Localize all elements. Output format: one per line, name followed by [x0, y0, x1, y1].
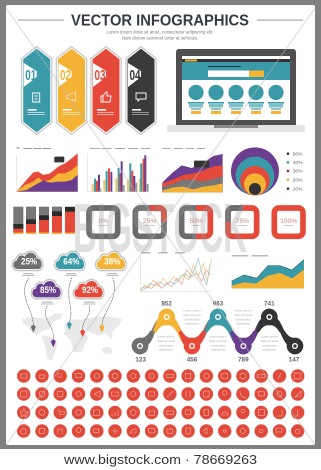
circle chart legend: 40%	[293, 160, 303, 166]
two series area chart	[232, 255, 304, 288]
banner 02: 02	[60, 67, 71, 84]
world map	[22, 313, 122, 360]
cloud 64%: 64%	[63, 256, 80, 267]
dashed leader lines	[25, 278, 115, 340]
cloud 85%: 85%	[40, 284, 56, 295]
progress square 50%: 50%	[189, 218, 203, 225]
timeline numbers: 789	[238, 357, 249, 364]
timeline captions: adipiscing	[159, 348, 173, 352]
subtitle: Lorem ipsum dolor sit amet, consectetur adipiscing elit.	[107, 30, 213, 34]
timeline captions: consectetur	[210, 343, 226, 347]
timeline captions: consectetur	[184, 317, 200, 321]
timeline numbers: 123	[135, 357, 146, 364]
subtitle	[107, 30, 213, 40]
timeline captions: Lorem ipsum	[183, 309, 201, 313]
circle chart legend: 50%	[293, 151, 303, 157]
cloud 92%: 92%	[82, 284, 98, 295]
progress square 25%	[135, 208, 164, 236]
subtitle: Nam dictum euismod tortor at vehicula.	[122, 36, 198, 40]
timeline captions	[157, 309, 278, 352]
circle chart legend: 20%	[293, 177, 303, 183]
stacked area chart	[162, 148, 223, 192]
timeline captions: Lorem ipsum	[261, 335, 278, 339]
timeline numbers: 741	[264, 301, 275, 308]
progress square 75%: 75%	[236, 218, 249, 225]
timeline captions: Lorem ipsum	[157, 335, 175, 339]
cloud 25%: 25%	[21, 256, 37, 267]
banner 04: 04	[130, 67, 141, 84]
timeline numbers: 456	[187, 357, 198, 364]
circle chart legend	[287, 151, 303, 192]
timeline numbers: 147	[289, 357, 300, 364]
concentric circle chart	[231, 147, 279, 195]
circle chart legend: 10%	[293, 186, 303, 192]
row of charts, zoom coordinates	[13, 147, 303, 236]
banner 01: 01	[25, 67, 36, 84]
banner 03: 03	[94, 67, 106, 84]
icon grid	[17, 369, 304, 438]
progress square 75%	[228, 208, 257, 236]
cloud captions	[22, 273, 119, 304]
cloud 38%: 38%	[104, 256, 121, 267]
progress square 0%	[89, 208, 118, 236]
timeline captions: consectetur	[158, 343, 174, 347]
timeline captions: dolor sit amet	[157, 339, 175, 343]
grouped bar chart	[87, 148, 150, 192]
multi line chart	[141, 252, 212, 292]
panel: numbered hexagon banners	[23, 48, 155, 133]
circle chart legend: 30%	[293, 169, 303, 175]
progress square 25%: 25%	[143, 218, 156, 225]
timeline captions: dolor sit amet	[260, 339, 278, 343]
timeline nodes	[132, 309, 303, 354]
progress square 50%	[182, 208, 210, 236]
timeline captions: Lorem ipsum	[235, 309, 252, 313]
timeline captions: adipiscing	[237, 322, 250, 326]
pins	[31, 322, 104, 347]
right side charts and timeline	[132, 252, 304, 364]
laptop mockup	[167, 49, 305, 132]
timeline captions: adipiscing	[263, 348, 276, 352]
timeline captions: dolor sit amet	[183, 313, 201, 317]
progress square 100%: 100%	[280, 218, 297, 225]
timeline numbers	[135, 301, 300, 364]
timeline captions: adipiscing	[185, 322, 199, 326]
timeline captions: consectetur	[236, 317, 251, 321]
timeline captions: dolor sit amet	[209, 339, 227, 343]
area chart: red yellow purple	[17, 147, 78, 192]
timeline captions: Lorem ipsum	[209, 335, 227, 339]
timeline captions: dolor sit amet	[234, 313, 252, 317]
timeline connectors	[140, 317, 295, 346]
timeline captions: consectetur	[262, 343, 277, 347]
timeline numbers: 852	[161, 301, 172, 308]
title: VECTOR INFOGRAPHICS	[71, 12, 249, 30]
timeline captions: adipiscing	[211, 348, 225, 352]
cloud world map panel	[13, 253, 125, 360]
stacked bar chart	[13, 207, 75, 234]
progress square 100%	[274, 208, 303, 236]
timeline numbers: 963	[213, 301, 224, 308]
laptop content columns	[188, 85, 284, 114]
progress square 0%: 0%	[99, 218, 108, 225]
source line: www.bigstock.com · 78669263	[63, 453, 257, 467]
